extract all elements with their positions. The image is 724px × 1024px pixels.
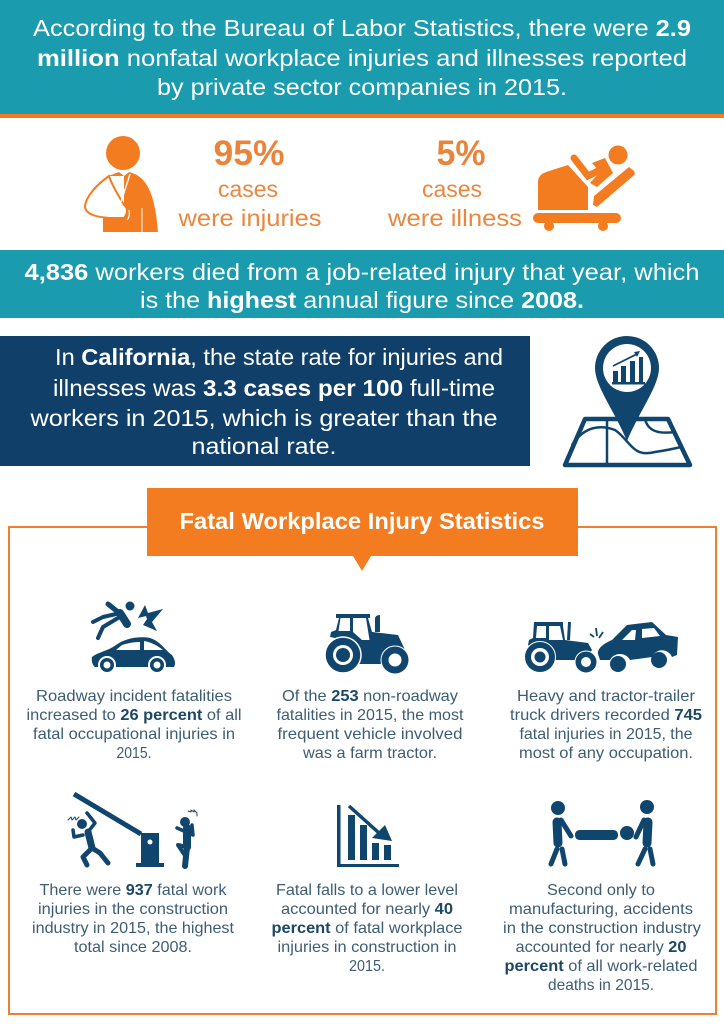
text: fatal falls: accounted for nearly 40 (281, 901, 453, 918)
icon: pedestrian hit by car (92, 602, 175, 673)
text: truck drivers: most of any occupation. (519, 745, 693, 762)
text: construction injuries: injuries in the construction (38, 901, 228, 918)
text: truck drivers: Heavy and tractor-trailer (517, 688, 696, 705)
stat: 5 percent illness: cases (422, 176, 482, 202)
icon: farm tractor (325, 614, 409, 674)
header band (0, 0, 724, 118)
text: construction injuries: industry in 2015, the highest (32, 920, 235, 937)
text: manufacturing (503, 882, 701, 994)
text: truck drivers: truck drivers recorded 745 (510, 707, 702, 724)
text: fatal falls: percent of fatal workplace (272, 920, 463, 937)
stat: 95 percent injuries: cases (218, 176, 278, 202)
text: fatal falls (272, 882, 463, 975)
icon: patient on bed (533, 146, 635, 231)
text: manufacturing: percent of all work-related (504, 958, 698, 975)
panel: California: workers in 2015, which is greater than the (29, 405, 497, 431)
header band: by private sector companies in 2015. (157, 74, 567, 100)
band: deaths: 4,836 workers died from a job-related injury that year, which (24, 259, 700, 285)
text: non-roadway: fatalities in 2015, the most (276, 707, 464, 724)
text: roadway: increased to 26 percent of all (26, 707, 242, 724)
icon: map pin with chart (565, 336, 690, 465)
stat: 5 percent illness: 5% (436, 134, 486, 173)
panel: California: illnesses was 3.3 cases per 100 full-time (53, 375, 495, 401)
icon: falling bar chart (337, 805, 399, 867)
text: manufacturing: in the construction industry (503, 920, 701, 937)
header band: According to the Bureau of Labor Statistics, there were 2.9 (33, 15, 691, 41)
text: manufacturing: manufacturing, accidents (509, 901, 693, 918)
header band: million nonfatal workplace injuries and illnesses reported (37, 45, 687, 71)
stat: 95 percent injuries: were injuries (177, 205, 322, 231)
text: construction injuries (32, 882, 235, 956)
panel: California (0, 336, 530, 466)
text: manufacturing: deaths in 2015. (548, 977, 654, 994)
text: construction injuries: total since 2008. (74, 939, 192, 956)
band: deaths: is the highest annual figure since 2008. (140, 287, 584, 313)
text: manufacturing: accounted for nearly 20 (516, 939, 687, 956)
icon: injured person with sling (85, 136, 158, 232)
icon: tractor crashing into car (524, 622, 678, 673)
heading: Fatal Workplace Injury Statistics: Fatal Workplace Injury Statistics (180, 508, 544, 534)
stat: 95 percent injuries (177, 134, 322, 231)
heading: Fatal Workplace Injury Statistics (147, 488, 578, 571)
text: roadway: Roadway incident fatalities (36, 688, 232, 705)
text: truck drivers: fatal injuries in 2015, the (520, 726, 693, 743)
panel: California: In California, the state rate for injuries and (55, 344, 503, 370)
text: fatal falls: injuries in construction in (278, 939, 456, 956)
band: deaths (0, 250, 724, 318)
text: non-roadway: Of the 253 non-roadway (282, 688, 458, 705)
text: roadway: 2015. (116, 745, 152, 762)
text: construction injuries: There were 937 fatal work (40, 882, 228, 899)
panel border: fatal statistics (9, 527, 716, 1014)
stat: 5 percent illness (387, 134, 522, 231)
stat: 95 percent injuries: 95% (214, 134, 284, 173)
icon: construction barrier and workers (68, 794, 197, 867)
text: non-roadway: frequent vehicle involved (278, 726, 462, 743)
stat: 5 percent illness: were illness (387, 205, 522, 231)
text: truck drivers (510, 688, 702, 762)
text: roadway (26, 688, 242, 762)
text: non-roadway: was a farm tractor. (302, 745, 437, 762)
panel: California: national rate. (192, 433, 336, 459)
text: roadway: fatal occupational injuries in (33, 726, 235, 743)
text: non-roadway (276, 688, 464, 762)
text: fatal falls: Fatal falls to a lower level (276, 882, 458, 899)
text: fatal falls: 2015. (349, 958, 385, 975)
text: manufacturing: Second only to (547, 882, 655, 899)
icon: two people carrying a stretcher (551, 800, 654, 864)
